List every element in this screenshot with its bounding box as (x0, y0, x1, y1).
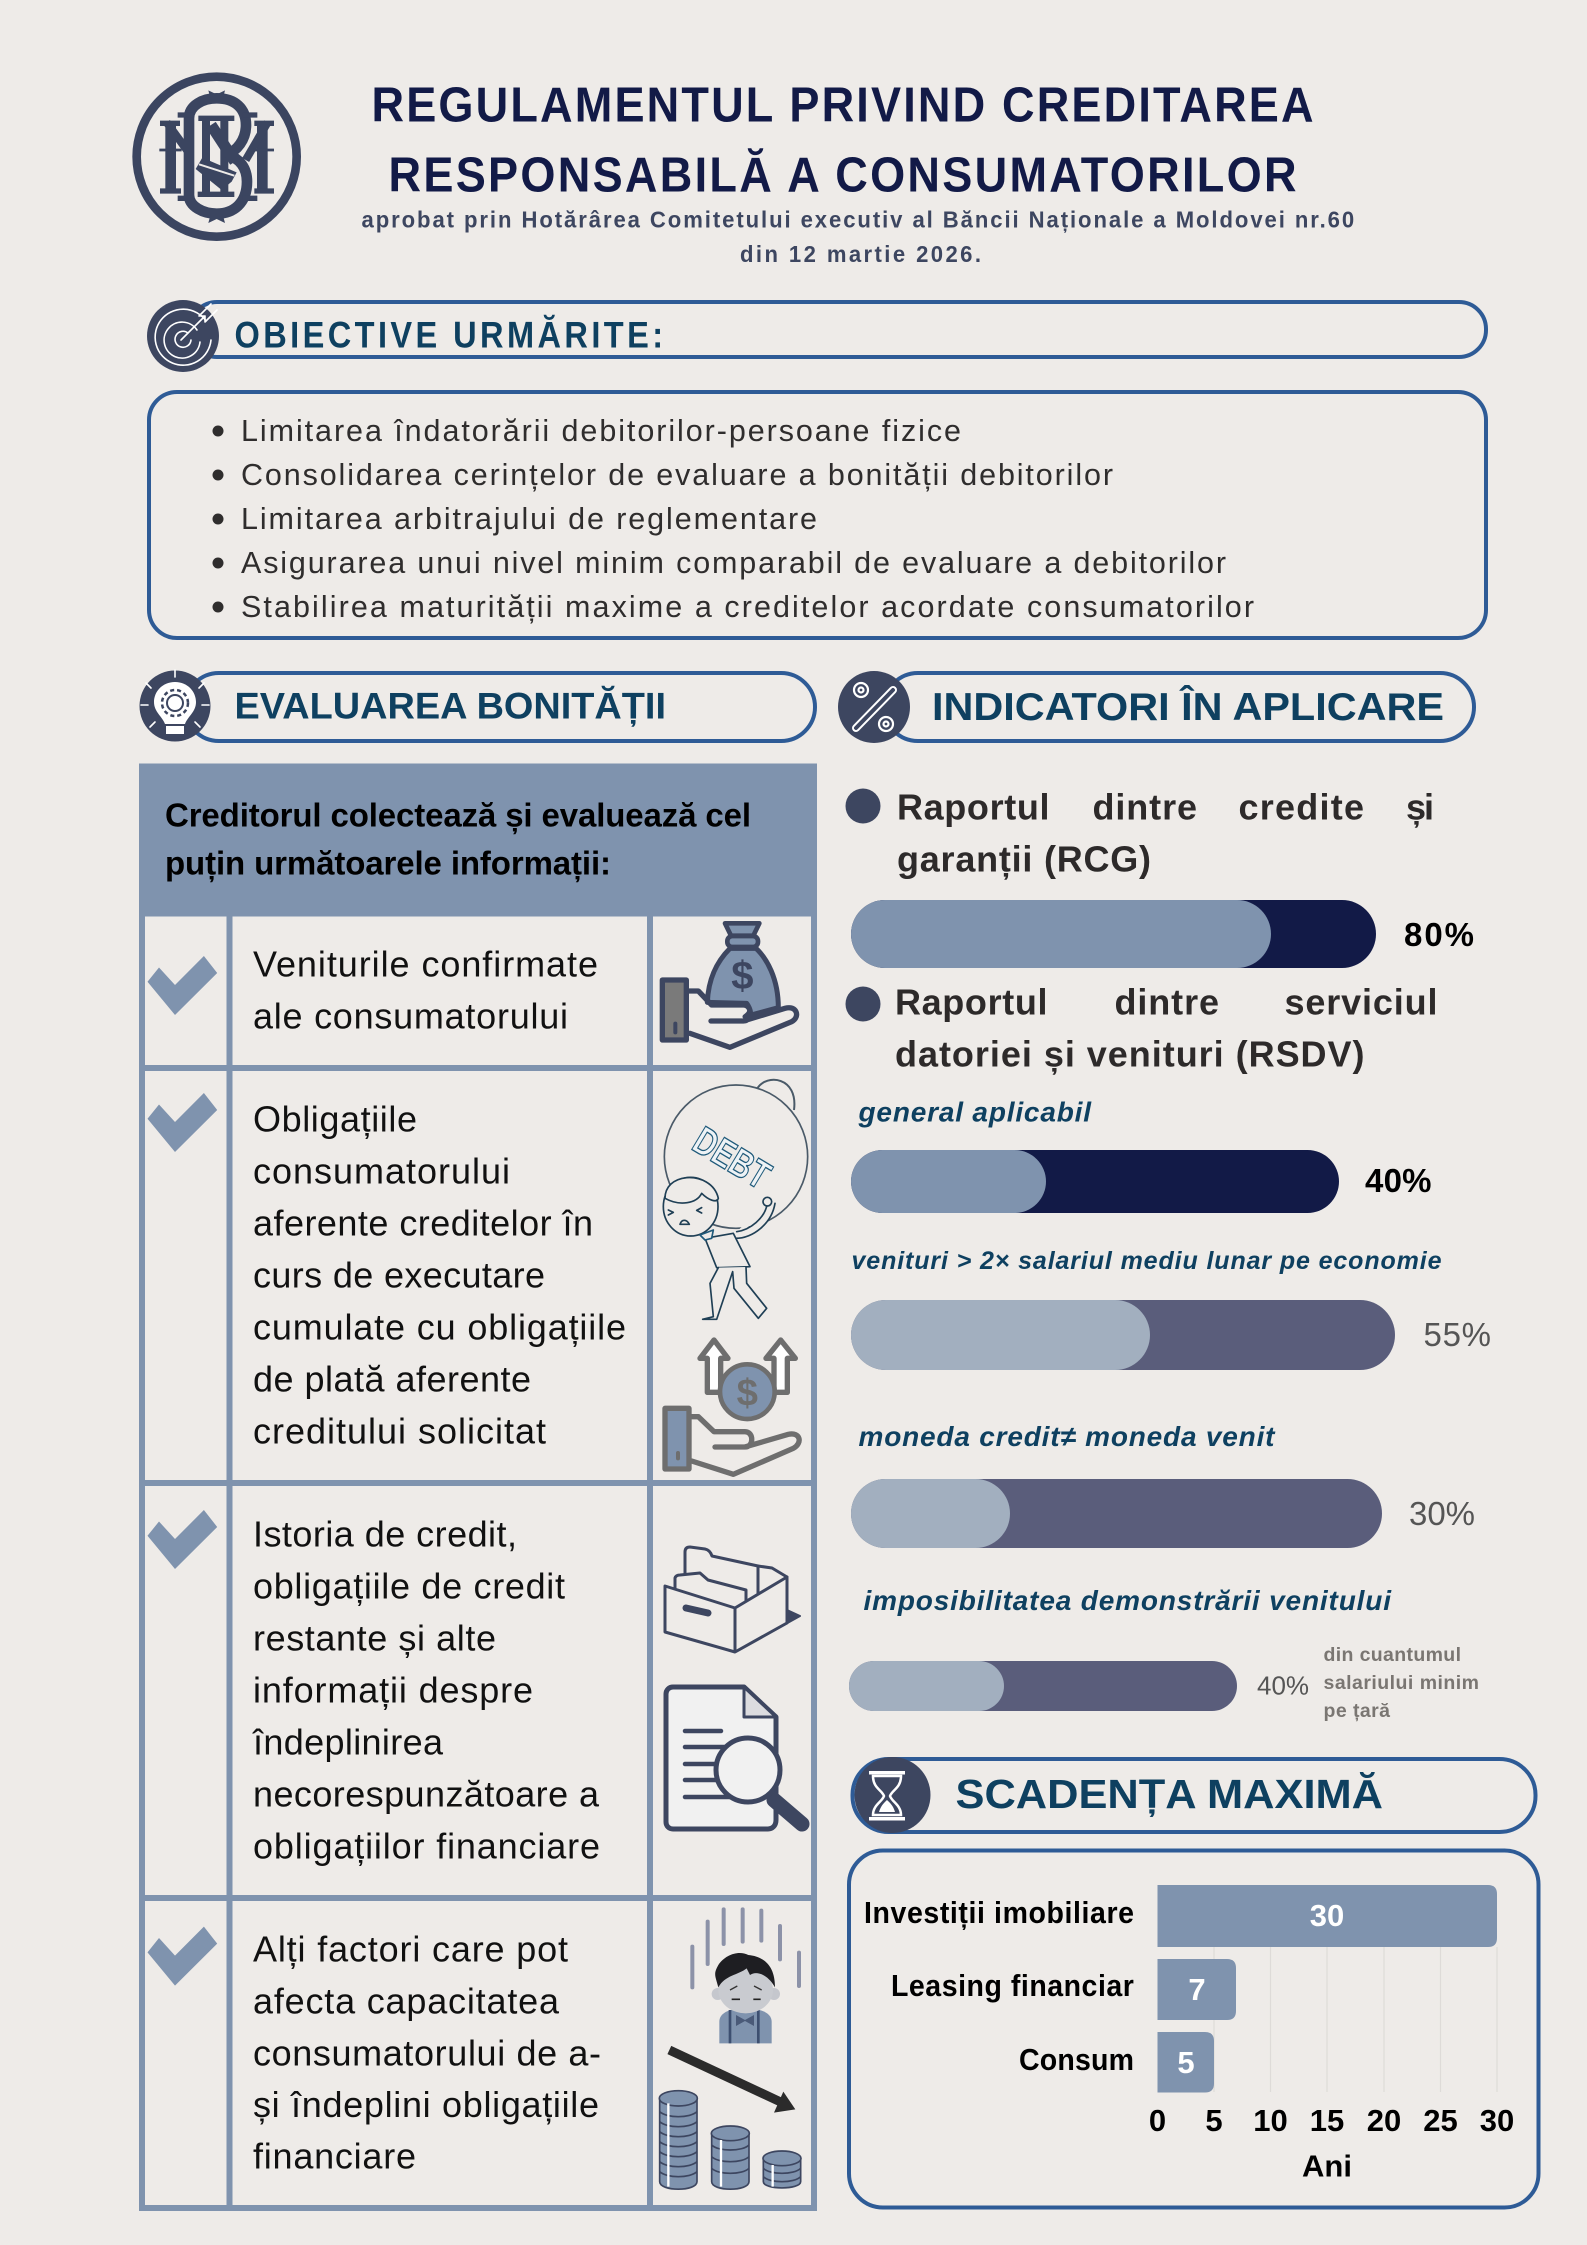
row 3: istoria de credit: îndeplinirea (252, 1722, 444, 1762)
bar: leasing financiar 7: Leasing financiar (891, 1969, 1134, 2003)
panel: obiective list (149, 392, 1486, 638)
bar: 55% (851, 1300, 1491, 1370)
row 2: obligatii: curs de executare (253, 1254, 545, 1296)
row 4: alti factori: consumatorului de a- (253, 2032, 601, 2074)
row 2: obligatii: Obligațiile (253, 1098, 417, 1140)
icon: man carrying debt ball (663, 1080, 808, 1319)
row 2: obligatii: aferente creditelor în (253, 1202, 593, 1244)
indicator: RCG label: și (1406, 786, 1434, 828)
icon: sad man (692, 1909, 799, 2043)
table header (139, 764, 817, 916)
x axis labels: 10 (1253, 2103, 1288, 2138)
icon: money bag in hand: $ (731, 954, 753, 998)
row 3: istoria de credit: necorespunzătoare a (253, 1774, 600, 1814)
label: venituri mari: venituri > 2× salariul mediu lunar pe economie (852, 1247, 1442, 1275)
row 2: obligatii: creditului solicitat (253, 1410, 546, 1452)
indicator: RSDV label: serviciul (1284, 982, 1438, 1022)
row 3: istoria de credit: obligațiilor financiare (253, 1826, 600, 1866)
row 3: istoria de credit (148, 1510, 600, 1866)
row 4: alti factori: financiare (253, 2136, 416, 2176)
panel: obiective list: Consolidarea cerințelor de evaluare a bonității debitorilor (241, 458, 1113, 492)
heading: obiective urmarite: OBIECTIVE URMĂRITE: (234, 315, 663, 356)
row 1: venituri (148, 944, 598, 1036)
row 4: alti factori: Alți factori care pot (253, 1928, 568, 1970)
title (372, 77, 1314, 202)
title: RESPONSABILĂ A CONSUMATORILOR (388, 147, 1297, 202)
panel: obiective list: Limitarea arbitrajului de reglementare (241, 502, 817, 536)
icon: falling arrow (669, 2050, 795, 2113)
bar: 55%: 55% (1424, 1316, 1491, 1353)
title: REGULAMENTUL PRIVIND CREDITAREA (372, 77, 1314, 132)
label: general aplicabil: general aplicabil (858, 1096, 1092, 1128)
heading: indicatori in aplicare: INDICATORI ÎN APLICARE (932, 685, 1444, 729)
x axis labels: 25 (1423, 2103, 1458, 2138)
heading: evaluarea bonitatii: EVALUAREA BONITĂȚII (234, 686, 666, 728)
icon: file box (665, 1547, 800, 1652)
subtitle: din 12 martie 2026. (740, 240, 981, 267)
row 3: istoria de credit: restante și alte (253, 1618, 496, 1658)
bar: leasing financiar 7 (891, 1959, 1236, 2020)
bar: RCG 80% (851, 900, 1474, 968)
bar: general 40%: 40% (1365, 1162, 1432, 1199)
icon: money bag in hand (662, 923, 797, 1047)
bar: consum 5: 5 (1177, 2045, 1195, 2080)
subtitle (362, 206, 1354, 267)
note: din cuantumul salariului minim pe tara: salariului minim (1324, 1672, 1479, 1694)
bar: consum 5 (1019, 2032, 1214, 2092)
x axis labels: 20 (1367, 2103, 1401, 2138)
indicator: RCG label: garanții (RCG) (897, 838, 1151, 880)
note: din cuantumul salariului minim pe tara: din cuantumul (1324, 1644, 1461, 1666)
note: din cuantumul salariului minim pe tara (1324, 1644, 1479, 1722)
row 2: obligatii: de plată aferente (253, 1358, 531, 1400)
x axis labels: 15 (1310, 2103, 1344, 2138)
indicator: RSDV label: datoriei și venituri (RSDV) (895, 1034, 1364, 1074)
indicator: RCG label: Raportul (897, 786, 1050, 828)
x axis labels: 30 (1480, 2103, 1514, 2138)
table header: puțin următoarele informații: (165, 844, 611, 882)
row 1: venituri: ale consumatorului (253, 996, 568, 1036)
indicator: RSDV label: Raportul (895, 982, 1048, 1022)
logo: BNM monogram (137, 77, 297, 237)
bar: investitii imobiliare 30 (864, 1885, 1497, 1947)
x axis labels: 0 (1149, 2103, 1166, 2138)
panel: obiective list: Stabilirea maturității maxime a creditelor acordate consumatorilor (241, 590, 1254, 624)
table header: Creditorul colectează și evaluează cel (165, 796, 751, 834)
note: din cuantumul salariului minim pe tara: pe țară (1324, 1700, 1390, 1722)
icon: coin and arrows in hand (665, 1340, 799, 1474)
indicator: RCG label: credite (1238, 786, 1364, 828)
heading: indicatori in aplicare (838, 671, 1474, 743)
panel: obiective list: Limitarea îndatorării debitorilor-persoane fizice (241, 414, 961, 448)
panel: obiective list: Asigurarea unui nivel minim comparabil de evaluare a debitorilor (241, 546, 1226, 580)
x axis labels: Ani (1302, 2148, 1352, 2184)
bar: 40% minimum wage: 40% (1257, 1670, 1309, 1700)
bar: 30%: 30% (1409, 1495, 1475, 1532)
heading: obiective urmarite (147, 300, 1486, 372)
row 4: alti factori (148, 1927, 601, 2176)
bar: leasing financiar 7: 7 (1188, 1972, 1206, 2007)
label: moneda credit: moneda credit≠ moneda venit (858, 1421, 1276, 1452)
bar: 40% minimum wage (849, 1661, 1309, 1711)
bar: RCG 80%: 80% (1404, 916, 1474, 953)
bar: investitii imobiliare 30: Investiții imobiliare (864, 1896, 1134, 1930)
indicator: RSDV label: dintre (1114, 982, 1219, 1022)
row 2: obligatii: consumatorului (253, 1150, 510, 1192)
panel: evaluation table (139, 764, 817, 2208)
x axis labels: 5 (1205, 2103, 1223, 2138)
bar: investitii imobiliare 30: 30 (1310, 1898, 1344, 1933)
label: imposibilitatea demonstrarii venitului: imposibilitatea demonstrării venitului (864, 1585, 1392, 1616)
x axis labels (1149, 2103, 1514, 2184)
panel: scadenta chart (849, 1850, 1538, 2208)
indicator: RSDV label (846, 982, 1438, 1074)
row 1: venituri: Veniturile confirmate (253, 944, 598, 984)
heading: scadenta maxima: SCADENȚA MAXIMĂ (956, 1771, 1383, 1817)
bar: 30% (851, 1479, 1475, 1548)
row 3: istoria de credit: informații despre (253, 1670, 533, 1710)
row 3: istoria de credit: Istoria de credit, (253, 1514, 517, 1554)
indicator: RCG label (846, 786, 1434, 880)
bar: general 40% (851, 1150, 1432, 1213)
icon: document with magnifier (666, 1687, 802, 1829)
row 2: obligatii (148, 1093, 626, 1452)
heading: scadenta maxima (852, 1757, 1536, 1833)
row 2: obligatii: cumulate cu obligațiile (253, 1306, 626, 1348)
icon: coin stacks (659, 2091, 801, 2189)
row 4: alti factori: și îndeplini obligațiile (253, 2084, 599, 2125)
icon: man carrying debt ball: DEBT (685, 1118, 778, 1198)
bar: consum 5: Consum (1019, 2043, 1134, 2077)
icon: coin and arrows in hand: $ (737, 1372, 758, 1415)
row 3: istoria de credit: obligațiile de credit (253, 1566, 565, 1606)
row 4: alti factori: afecta capacitatea (253, 1980, 560, 2022)
heading: evaluarea bonitatii (140, 670, 815, 742)
indicator: RCG label: dintre (1092, 786, 1197, 828)
subtitle: aprobat prin Hotărârea Comitetului executiv al Băncii Naționale a Moldovei nr.60 (362, 206, 1354, 233)
